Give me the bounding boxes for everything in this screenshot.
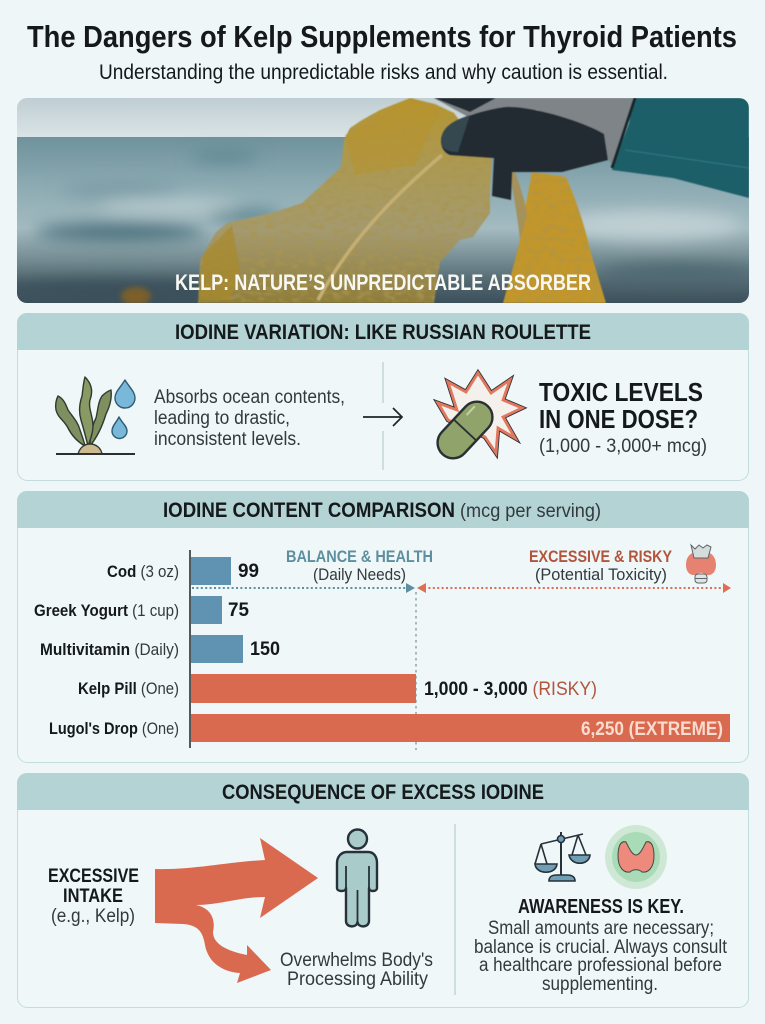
text: absorbs ocean contents [154, 387, 345, 450]
text: overwhelms body: Processing Ability [287, 969, 428, 990]
text: awareness is key: a healthcare professional before [479, 955, 722, 976]
text: excessive intake [48, 866, 139, 927]
panel: iodine variation [17, 313, 749, 480]
divider [454, 824, 456, 995]
text: awareness is key: AWARENESS IS KEY. [518, 896, 684, 918]
photo: hand holding kelp over the sea [0, 98, 760, 305]
zone: balance and health: BALANCE & HEALTH [286, 547, 433, 566]
callout: toxic levels [539, 377, 707, 457]
bar: multivitamin: 150 [250, 638, 280, 660]
bar: kelp pill: Kelp Pill (One) [78, 679, 179, 698]
icon: balance scales [535, 832, 590, 881]
bar chart [34, 545, 731, 750]
kelp blade [198, 98, 492, 303]
divider [382, 362, 384, 470]
heading: CONSEQUENCE OF EXCESS IODINE [222, 781, 544, 804]
threshold line [415, 592, 417, 750]
arrow [363, 408, 402, 426]
bar: lugol's drop: Lugol's Drop (One) [49, 719, 179, 738]
text: awareness is key: Small amounts are necessary; [488, 918, 714, 939]
panel: consequence of excess iodine [17, 773, 749, 1008]
bar: greek yogurt: 75 [228, 599, 249, 621]
photo caption: KELP: NATURE’S UNPREDICTABLE ABSORBER [175, 270, 591, 295]
zone: excessive and risky: (Potential Toxicity) [535, 565, 667, 584]
axis [189, 550, 191, 748]
bar: multivitamin [40, 635, 280, 663]
kelp strand right [502, 172, 606, 303]
text: excessive intake: (e.g., Kelp) [51, 906, 135, 927]
icon: thyroid gland [686, 545, 716, 583]
bar: kelp pill [78, 674, 597, 703]
text: excessive intake: INTAKE [63, 886, 123, 907]
text: absorbs ocean contents: leading to drastic, [154, 408, 290, 429]
text: excessive intake: EXCESSIVE [48, 866, 139, 887]
text: absorbs ocean contents: inconsistent levels. [154, 429, 301, 450]
bar: multivitamin: Multivitamin (Daily) [40, 640, 179, 659]
bar: greek yogurt [34, 596, 249, 624]
bar: kelp pill: 1,000 - 3,000 (RISKY) [424, 678, 597, 700]
text: awareness is key [474, 896, 728, 995]
header band [17, 491, 749, 528]
arrow: splitting flow [155, 838, 318, 983]
header band [17, 773, 749, 810]
icon: person [337, 830, 377, 926]
zone: excessive and risky: EXCESSIVE & RISKY [529, 547, 673, 566]
panel: iodine content comparison [17, 491, 749, 762]
icon: burst and pill [431, 373, 522, 465]
subtitle: Understanding the unpredictable risks and why caution is essential. [99, 61, 668, 84]
sleeve [612, 98, 749, 198]
heading: IODINE VARIATION: LIKE RUSSIAN ROULETTE [175, 321, 591, 344]
zone: excessive and risky [417, 547, 731, 593]
text: awareness is key: supplementing. [542, 974, 658, 995]
bar: cod: Cod (3 oz) [107, 562, 179, 581]
heading: IODINE CONTENT COMPARISON [163, 499, 455, 522]
bar: cod [107, 557, 259, 585]
bar: lugol's drop [49, 714, 730, 742]
icon: healthy thyroid [605, 825, 667, 889]
callout: toxic levels: IN ONE DOSE? [539, 404, 698, 434]
text: absorbs ocean contents: Absorbs ocean contents, [154, 387, 345, 408]
header band [17, 313, 749, 350]
zone: balance and health: (Daily Needs) [313, 565, 406, 584]
zone: balance and health [192, 547, 433, 593]
text: overwhelms body: Overwhelms Body's [280, 950, 433, 971]
bar: greek yogurt: Greek Yogurt (1 cup) [34, 601, 179, 620]
bar: cod: 99 [238, 560, 259, 582]
glove [434, 98, 749, 200]
text: overwhelms body [280, 950, 433, 990]
callout: toxic levels: (1,000 - 3,000+ mcg) [539, 436, 707, 457]
callout: toxic levels: TOXIC LEVELS [539, 377, 703, 407]
bar: lugol's drop: 6,250 (EXTREME) [581, 718, 723, 740]
icon: kelp plant and water drops [56, 377, 135, 454]
text: awareness is key: balance is crucial. Always consult [474, 937, 728, 958]
heading: (mcg per serving) [460, 501, 601, 522]
